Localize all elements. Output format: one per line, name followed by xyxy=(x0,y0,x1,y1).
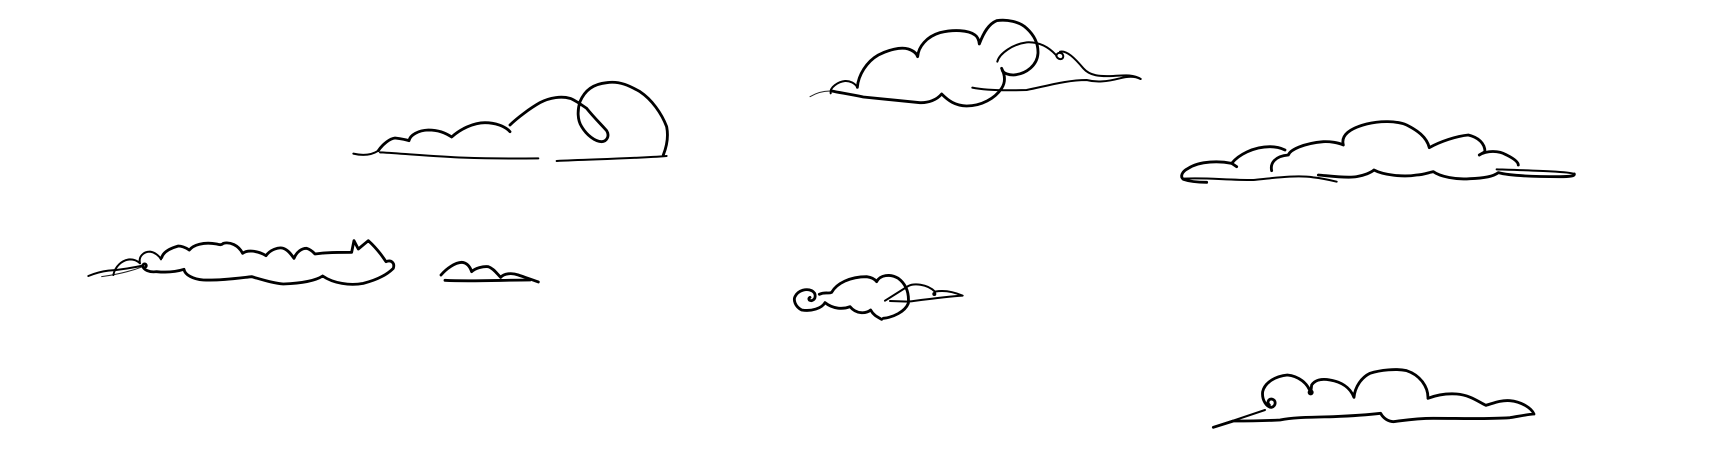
cloud 7: bottom right cloud with spiral and tail xyxy=(1213,370,1534,427)
cloud 1: top left with loop xyxy=(353,82,667,161)
cloud 2: top centre with curl xyxy=(810,20,1141,106)
cloud 4: left long jagged cloud xyxy=(88,241,394,284)
cloud 5: small left cloud xyxy=(441,262,538,282)
cloud 6: small centre cloud with spiral xyxy=(794,275,963,319)
cloud 3: upper right long cloud xyxy=(1182,122,1574,182)
